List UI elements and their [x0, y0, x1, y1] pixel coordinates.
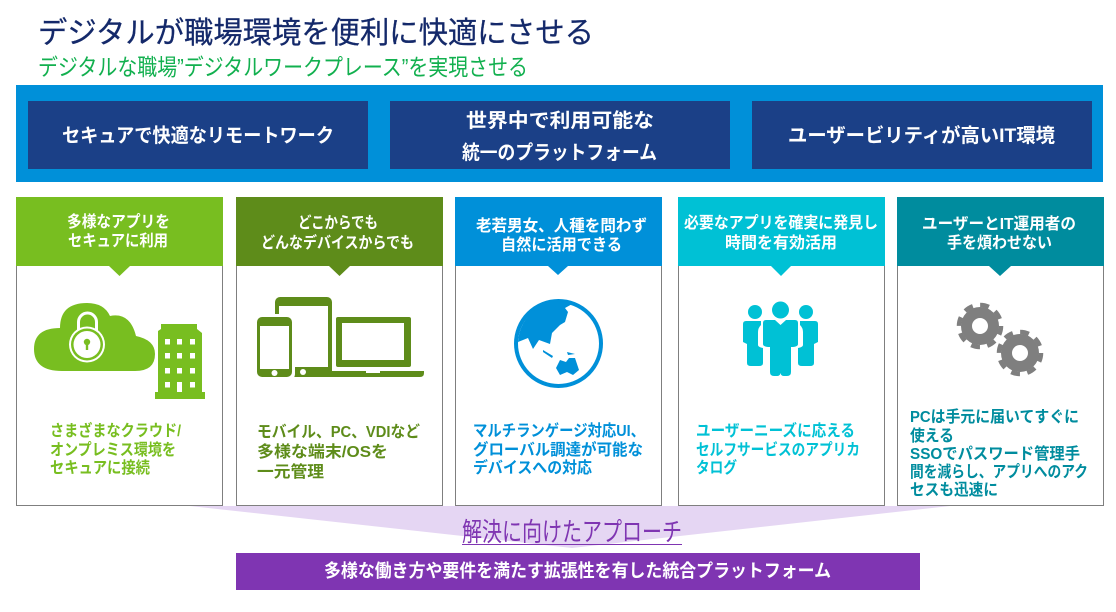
panel: card 3 anyone	[455, 197, 662, 506]
card 4 description: タログ	[696, 458, 737, 477]
solution bar	[236, 553, 920, 590]
value box: secure remote work	[28, 101, 368, 169]
card 1 description: さまざまなクラウド/	[50, 421, 181, 440]
value box: usability: ユーザービリティが高いIT環境	[788, 124, 1055, 147]
card 5 heading: ユーザーとIT運用者の	[922, 215, 1076, 233]
panel: card 5 reduce burden	[897, 197, 1104, 506]
card 4 description: セルフサービスのアプリカ	[696, 440, 860, 459]
card 1 description: セキュアに接続	[50, 459, 150, 477]
icon: cloud with padlock and building	[34, 303, 205, 399]
icon: globe	[516, 301, 601, 386]
value box: global unified platform	[390, 101, 730, 169]
card 5 description: 使える	[910, 427, 954, 445]
card 5 heading	[922, 215, 1076, 252]
card 2 description: モバイル、PC、VDIなど	[257, 423, 420, 441]
card 3 description: デバイスへの対応	[473, 458, 592, 477]
card 3 heading	[476, 216, 647, 254]
panel: card 2 any device	[236, 197, 443, 506]
card 3 heading: 老若男女、人種を問わず	[476, 216, 647, 235]
card 2 description: 一元管理	[257, 462, 324, 481]
card 3 heading: 自然に活用できる	[501, 235, 622, 254]
card 1 description	[50, 421, 181, 477]
approach label: 解決に向けたアプローチ	[462, 517, 682, 547]
value box: secure remote work: セキュアで快適なリモートワーク	[62, 125, 334, 147]
card 2 heading	[261, 214, 414, 252]
value box: usability	[752, 101, 1092, 169]
title: デジタルが職場環境を便利に快適にさせる	[38, 17, 594, 50]
card 4 description: ユーザーニーズに応える	[696, 421, 855, 440]
card 5 description: SSOでパスワード管理手	[910, 444, 1080, 463]
card 4 heading: 必要なアプリを確実に発見し	[684, 213, 878, 232]
value box: global unified platform: 世界中で利用可能な	[466, 110, 654, 132]
card 4 heading: 時間を有効活用	[725, 234, 837, 252]
card 1 heading: セキュアに利用	[68, 232, 168, 250]
panel: card 4 discover apps	[678, 197, 885, 506]
card 1 description: オンプレミス環境を	[50, 441, 176, 459]
card 5 heading: 手を煩わせない	[947, 233, 1052, 252]
icon: phone, tablet and laptop	[254, 297, 424, 380]
card 5 description: 間を減らし、アプリへのアク	[910, 463, 1088, 481]
solution bar: 多様な働き方や要件を満たす拡張性を有した統合プラットフォーム	[324, 560, 831, 581]
card 1 heading: 多様なアプリを	[67, 212, 170, 231]
card 5 description: PCは手元に届いてすぐに	[910, 407, 1079, 426]
card 3 description	[473, 421, 645, 477]
icon: gears	[959, 305, 1041, 374]
card 4 heading	[684, 213, 878, 252]
card 2 heading: どこからでも	[298, 214, 378, 232]
card 2 description: 多様な端末/OSを	[257, 442, 388, 461]
card 1 heading	[67, 212, 170, 250]
card 5 description: セスも迅速に	[910, 481, 998, 499]
card 4 description	[696, 421, 860, 477]
icon: group of people	[743, 302, 818, 376]
value box: global unified platform: 統一のプラットフォーム	[462, 142, 657, 164]
approach funnel triangle	[190, 506, 950, 548]
panel: card 1 secure apps	[16, 197, 223, 506]
card 2 heading: どんなデバイスからでも	[261, 233, 414, 252]
subtitle: デジタルな職場”デジタルワークプレース”を実現させる	[38, 54, 528, 80]
card 3 description: グローバル調達が可能な	[473, 440, 643, 459]
panel: top value band	[16, 85, 1103, 182]
card 3 description: マルチランゲージ対応UI、	[473, 421, 645, 440]
card 2 description	[257, 423, 420, 481]
card 5 description	[910, 407, 1088, 499]
